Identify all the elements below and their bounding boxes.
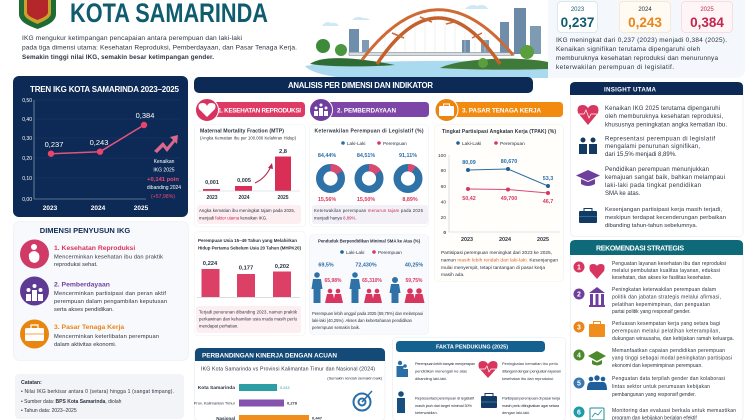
panel: benchmark comparison: (Semakin rendah semakin baik) bbox=[327, 376, 383, 380]
insight: health: Kenaikan IKG 2025 terutama dipengaruhi bbox=[605, 106, 720, 112]
stat card: 2025 bbox=[682, 2, 732, 32]
panel: labour force participation: Tingkat Partisipasi Angkatan Kerja (TPAK) (%) bbox=[442, 129, 556, 135]
panel: maternal mortality chart: 0,001 bbox=[205, 180, 219, 186]
line: IKG values: 0,237 bbox=[45, 140, 63, 149]
heading: analysis by dimension: ANALISIS PER DIMENSI DAN INDIKATOR bbox=[288, 81, 433, 90]
legend bbox=[340, 250, 402, 255]
panel: education attainment: 69,5% bbox=[318, 262, 334, 268]
panel: key insights: INSIGHT UTAMA bbox=[604, 86, 657, 94]
dimension: labour market: Mencerminkan keterlibatan perempuan bbox=[54, 334, 159, 340]
dimension: empowerment: perempuan dalam pengambilan keputusan bbox=[54, 299, 167, 305]
dimension: empowerment: 2. Pemberdayaan bbox=[54, 282, 110, 288]
panel: education attainment bbox=[310, 234, 428, 334]
recommendation 2: Peningkatan keterwakilan perempuan dalam bbox=[612, 287, 716, 293]
stat card: 2025: 2025 bbox=[700, 7, 714, 13]
panel: labour force participation: 40 bbox=[441, 200, 446, 206]
dimension: reproductive health: 1. Kesehatan Reproduksi bbox=[54, 245, 135, 252]
dimension: empowerment: Mencerminkan partisipasi dan peran aktif bbox=[54, 291, 166, 297]
fact: education: dibanding laki-laki. bbox=[415, 376, 447, 381]
insight: legislature bbox=[579, 136, 715, 158]
recommendation 1 bbox=[574, 261, 726, 281]
panel: IKG trend chart: 2024 bbox=[91, 205, 106, 212]
recommendation 5: lintas sektor untuk perumusan kebijakan bbox=[612, 384, 710, 390]
panel: maternal mortality chart: 2025 bbox=[277, 195, 289, 201]
line: IKG values bbox=[45, 111, 154, 157]
dimension: empowerment bbox=[20, 276, 167, 313]
section header: empowerment: 2. PEMBERDAYAAN bbox=[337, 108, 396, 114]
panel: strategic recommendations bbox=[570, 240, 743, 420]
insight: labour bbox=[579, 207, 726, 229]
insight: labour: Kesenjangan partisipasi kerja masih terjadi, bbox=[605, 207, 722, 213]
panel: early marriage and pregnancy chart bbox=[194, 232, 306, 336]
panel: IKG trend chart: 0,40 bbox=[22, 117, 32, 123]
panel: labour force participation: 0 bbox=[443, 230, 446, 236]
line: female: 46,7 bbox=[543, 199, 553, 205]
panel: notes: Catatan: bbox=[21, 380, 42, 386]
fact: education: Perempuan lebih banyak menyerapan bbox=[415, 361, 475, 366]
donut: 2024 bbox=[357, 153, 380, 203]
panel: early marriage and pregnancy chart: Perempuan Usia 15–49 Tahun yang Melahirkan bbox=[198, 238, 297, 243]
recommendation 5: pembangunan yang responsif gender. bbox=[612, 392, 696, 398]
donut: 2023: 84,44% bbox=[318, 153, 336, 159]
heading: analysis by dimension bbox=[194, 77, 533, 93]
panel: notes bbox=[15, 374, 184, 419]
panel: labour force participation: 20 bbox=[441, 215, 446, 221]
note bbox=[312, 311, 423, 330]
insight: education: Pendidikan perempuan menunjukkan bbox=[605, 167, 709, 173]
callout: 2025 increase: (+57,98%) bbox=[151, 194, 175, 200]
section header: labour market: 3. PASAR TENAGA KERJA bbox=[462, 108, 541, 114]
legend: Laki-Laki bbox=[346, 250, 364, 255]
note: namun masih lebih rendah dari laki-laki. Kesenjangan bbox=[441, 258, 558, 264]
bar: Kota Samarinda: Kota Samarinda bbox=[198, 385, 235, 391]
recommendation 1: Penguatan layanan kesehatan ibu dan reproduksi bbox=[612, 261, 726, 267]
dimension: reproductive health: reproduksi sehat. bbox=[54, 262, 98, 268]
intro text bbox=[22, 35, 297, 61]
line: female bbox=[462, 187, 553, 205]
dimension: labour market bbox=[20, 320, 159, 348]
recommendation 1: melalui pembulatan kualitas layanan, edukasi bbox=[612, 268, 720, 274]
donut: 2024: 84,51% bbox=[357, 153, 375, 159]
bar: Nasional bbox=[216, 415, 323, 420]
insight: health bbox=[578, 105, 727, 128]
legend: Laki-Laki bbox=[347, 141, 365, 146]
insight: legislature: mengalami penurunan signifikan, bbox=[605, 144, 700, 150]
panel: early marriage and pregnancy chart: 0,177 bbox=[239, 266, 253, 272]
panel: maternal mortality chart: 2,8 bbox=[279, 149, 288, 155]
line: IKG values: 0,384 bbox=[136, 111, 154, 120]
bar: Prov. Kalimantan Timur: 0,278 bbox=[287, 400, 298, 406]
summary text: keterwakilan perempuan di legislatif. bbox=[556, 64, 674, 71]
insight: education: kemajuan sangat baik, bahkan melampaui bbox=[605, 175, 725, 181]
dimension: labour market: 3. Pasar Tenaga Kerja bbox=[54, 324, 124, 331]
icon: target bbox=[354, 391, 372, 410]
line: male: 80,670 bbox=[501, 159, 517, 165]
panel: notes: • Tahun data: 2023–2025 bbox=[21, 408, 77, 414]
dimension: empowerment: serta akses pendidikan. bbox=[54, 307, 114, 313]
note: Angka kematian ibu meningkat tajam pada 2025, bbox=[199, 208, 295, 213]
legend: Laki-Laki bbox=[462, 141, 481, 147]
note bbox=[312, 205, 428, 224]
panel: IKG trend chart: 0,20 bbox=[22, 156, 32, 162]
legend: Perempuan bbox=[378, 250, 402, 255]
legend: Perempuan bbox=[500, 141, 525, 147]
panel: labour force participation: 2024 bbox=[499, 237, 511, 243]
panel: notes: • Nilai IKG berkisar antara 0 (setara) hingga 1 (sangat timpang). bbox=[21, 389, 174, 395]
line: male bbox=[462, 159, 553, 188]
fact: education bbox=[396, 361, 475, 381]
bar: Kota Samarinda: 0,243 bbox=[280, 386, 290, 390]
stat card: 2023: 2023 bbox=[571, 7, 585, 13]
recommendation 2: pelatihan kepemimpinan, dan penguatan bbox=[612, 302, 710, 308]
panel: IKG dimensions bbox=[14, 222, 188, 360]
recommendation 4 bbox=[574, 348, 732, 369]
section header: reproductive health bbox=[196, 98, 305, 122]
fact: labour: masih perlu ditingkatkan agar setara bbox=[502, 403, 560, 408]
fact: legislature: masih jauh dari target minimal 30% bbox=[415, 403, 473, 408]
intro text: pada tiga dimensi utama: Kesehatan Reproduksi, Pemberdayaan, dan Pasar Tenaga Kerja. bbox=[22, 44, 297, 52]
stat card: 2024: 2024 bbox=[638, 7, 652, 13]
dimension: labour market: dalam aktivitas ekonomi. bbox=[54, 342, 117, 348]
panel: IKG trend chart: 0,50 bbox=[22, 98, 32, 104]
recommendation 5 bbox=[574, 375, 725, 398]
intro text: Semakin tinggi nilai IKG, semakin besar ketimpangan gender. bbox=[22, 54, 214, 61]
panel: benchmark comparison bbox=[194, 348, 385, 420]
panel: maternal mortality chart: 0,005 bbox=[237, 178, 251, 184]
panel: benchmark comparison: PERBANDINGAN KINERJA DENGAN ACUAN bbox=[202, 352, 337, 360]
recommendation 3 bbox=[574, 321, 734, 342]
recommendation 6 bbox=[574, 406, 736, 420]
panel: IKG trend chart: 0,00 bbox=[22, 197, 32, 203]
insight: legislature: dari 15,5% menjadi 8,89%. bbox=[605, 152, 677, 158]
fact: labour: dengan laki-laki. bbox=[502, 410, 530, 415]
bar: Prov. Kalimantan Timur bbox=[194, 400, 298, 406]
panel: labour force participation: 80 bbox=[441, 168, 446, 174]
note: menjadi hanya 8,89%. bbox=[314, 216, 357, 220]
bar: Kota Samarinda bbox=[198, 384, 290, 391]
pictogram: female figures bbox=[325, 288, 424, 303]
insight: education: SMA ke atas. bbox=[605, 191, 641, 197]
callout: 2025 increase: IKG 2025 bbox=[153, 168, 175, 174]
panel: IKG dimensions: DIMENSI PENYUSUN IKG bbox=[40, 226, 130, 235]
donut: 2025: 91,11% bbox=[399, 153, 417, 159]
note: perkawinan dan kehamilan usia muda masih perlu bbox=[199, 316, 298, 322]
fact: education: pendidikan menengah ke atas bbox=[415, 368, 467, 374]
recommendation 3: perempuan melalui pelatihan keterampilan, bbox=[612, 328, 720, 334]
panel: maternal mortality chart: (Angka Kematian Ibu per 100.000 Kelahiran Hidup) bbox=[200, 136, 297, 140]
recommendation 5: Penguatan data terpilah gender dan kolaborasi bbox=[612, 376, 725, 382]
section header: empowerment bbox=[310, 98, 429, 122]
panel: labour force participation: 2023 bbox=[461, 237, 473, 243]
note bbox=[197, 205, 301, 224]
fact: maternal mortality: ditangani dengan penguatan layanan bbox=[502, 368, 561, 374]
panel: strategic recommendations: REKOMENDASI STRATEGIS bbox=[596, 246, 684, 252]
callout: 2025 increase: dibanding 2024 bbox=[147, 185, 181, 191]
fact: legislature: Representasi perempuan di legislatif bbox=[415, 396, 475, 400]
section header: reproductive health: 1. KESEHATAN REPRODUKSI bbox=[218, 108, 301, 114]
stat card: 2024 bbox=[620, 2, 670, 32]
insight: legislature: Representasi perempuan di legislatif bbox=[605, 136, 715, 142]
line: female: 50,42 bbox=[462, 196, 476, 202]
callout: 2025 increase: +0,141 poin bbox=[147, 177, 179, 183]
line: male: 80,09 bbox=[462, 160, 476, 166]
panel: IKG trend chart bbox=[13, 76, 188, 217]
panel: education attainment: 65,98% bbox=[325, 278, 342, 284]
donut: 2025: 8,89% bbox=[402, 197, 418, 203]
panel: education attainment: 72,430% bbox=[355, 262, 377, 268]
fact: labour bbox=[481, 394, 561, 415]
dimension: reproductive health bbox=[20, 240, 163, 268]
panel: IKG summary bbox=[548, 0, 745, 78]
panel: notes: • Sumber data: BPS Kota Samarinda, diolah bbox=[21, 399, 122, 405]
recommendation 2 bbox=[574, 287, 721, 315]
panel: education attainment: 65,310% bbox=[362, 278, 382, 284]
panel: legislative representation bbox=[310, 124, 428, 226]
donut: 2023: 15,56% bbox=[318, 197, 336, 203]
recommendation 6: 6 bbox=[577, 410, 581, 416]
panel: maternal mortality chart: 2024 bbox=[238, 195, 250, 201]
recommendation 6: Monitoring dan evaluasi berkala untuk memastikan bbox=[612, 408, 736, 414]
logo: city shield bbox=[19, 0, 56, 29]
panel: early marriage and pregnancy chart: Hidup Pertama Sebelum Usia 20 Tahun (MHPK20) bbox=[198, 246, 302, 250]
note: mendapat perhatian. bbox=[199, 324, 238, 328]
section header: labour market bbox=[435, 98, 563, 122]
panel: maternal mortality chart bbox=[194, 124, 306, 226]
panel: maternal mortality chart: 2023 bbox=[206, 195, 218, 201]
insight: education bbox=[576, 167, 725, 197]
note: mulai menyempit, tetapi tantangan di pasar kerja bbox=[441, 265, 545, 271]
legend bbox=[341, 141, 407, 146]
note bbox=[196, 306, 301, 333]
fact: legislature: keterwakilan. bbox=[415, 410, 438, 415]
panel: IKG trend chart: 2025 bbox=[134, 205, 149, 212]
recommendation 4: 4 bbox=[577, 352, 581, 360]
summary text: memburuknya kesehatan reproduksi dan menurunnya bbox=[556, 55, 718, 62]
fact: labour: Partisipasi perempuan di pasar kerja bbox=[502, 396, 561, 400]
note: menjadi faktor utama kenaikan IKG. bbox=[199, 216, 267, 220]
recommendation 3: 3 bbox=[577, 324, 581, 332]
note: Perempuan lebih unggul pada 2025 (59,75%) dan melampaui bbox=[312, 311, 423, 316]
panel: IKG trend chart: 0,30 bbox=[22, 136, 32, 142]
note: Keterwakilan perempuan menurun tajam pada 2025 bbox=[314, 208, 424, 213]
panel: early marriage and pregnancy chart: 0,202 bbox=[275, 264, 289, 270]
recommendation 1: 1 bbox=[577, 264, 581, 272]
recommendation 4: yang tinggi sebagai modal peningkatan partisipasi bbox=[612, 356, 732, 362]
panel: education attainment: 40,25% bbox=[405, 262, 423, 268]
donut: 2025 bbox=[397, 153, 419, 203]
insight: health: oleh memburuknya kesehatan reproduksi, bbox=[605, 114, 723, 120]
legend bbox=[456, 141, 525, 147]
note: Terjadi penurunan dibanding 2023, namun praktik bbox=[199, 310, 298, 314]
panel: IKG trend chart: 0,10 bbox=[22, 176, 32, 182]
fact: maternal mortality: kesehatan ibu dan reproduksi. bbox=[502, 376, 554, 381]
dimension: reproductive health: Mencerminkan kesehatan ibu dan praktik bbox=[54, 254, 163, 260]
illustration: Mahakam bridge and skyline bbox=[305, 5, 550, 78]
panel: benchmark comparison: IKG Kota Samarinda vs Provinsi Kalimantan Timur dan Nasional (2024) bbox=[201, 366, 375, 372]
note bbox=[441, 250, 558, 278]
insight: labour: meskipun terdapat kecenderungan perbaikan bbox=[605, 215, 726, 221]
donut: 2023 bbox=[318, 153, 341, 203]
panel: IKG trend chart: TREN IKG KOTA SAMARINDA 2023–2025 bbox=[30, 85, 180, 94]
panel: education attainment: Penduduk Berpendidikan Minimal SMA ke Atas (%) bbox=[318, 238, 421, 244]
legend: Perempuan bbox=[383, 141, 407, 146]
line: male: 53,3 bbox=[543, 176, 553, 182]
note: masih ada. bbox=[441, 272, 464, 278]
recommendation 4: Memanfaatkan capaian pendidikan perempuan bbox=[612, 348, 725, 354]
insight: education: laki-laki pada tingkat pendidikan bbox=[605, 183, 701, 189]
note: perempuan semakin baik. bbox=[312, 325, 360, 330]
fact: legislature bbox=[397, 391, 475, 415]
recommendation 3: Perluasan kesempatan kerja yang setara bagi bbox=[612, 321, 720, 327]
panel: key insights bbox=[570, 82, 743, 236]
insight: labour: dibanding tahun-tahun sebelumnya. bbox=[605, 223, 698, 229]
recommendation 2: partai politik yang responsif gender. bbox=[612, 309, 691, 315]
bar: Prov. Kalimantan Timur: Prov. Kalimantan Timur bbox=[194, 400, 236, 406]
recommendation 2: 2 bbox=[577, 292, 581, 298]
panel: supporting facts bbox=[392, 338, 566, 420]
stat card: 2023: 0,237 bbox=[561, 15, 594, 30]
panel: early marriage and pregnancy chart: 0,224 bbox=[203, 261, 218, 267]
panel: labour force participation bbox=[434, 124, 564, 282]
recommendation 2: politik dan jabatan strategis melalui afirmasi, bbox=[612, 294, 721, 300]
panel: labour force participation: 60 bbox=[441, 184, 446, 190]
pictogram: male figures bbox=[312, 272, 400, 303]
panel: maternal mortality chart: Maternal Mortality Fraction (MTP) bbox=[200, 128, 284, 134]
panel: IKG trend chart: 2023 bbox=[43, 205, 58, 212]
icon: rising arrow bbox=[154, 135, 178, 153]
stat card: 2023 bbox=[558, 2, 598, 32]
summary text bbox=[556, 37, 727, 71]
recommendation 3: dukungan wirausaha, dan kebijakan ramah keluarga. bbox=[612, 336, 734, 342]
line: IKG values: 0,243 bbox=[90, 138, 108, 147]
summary text: Kenaikan signifikan terutama dipengaruhi oleh bbox=[556, 46, 700, 53]
intro text: IKG mengukur ketimpangan pencapaian antara perempuan dan laki-laki bbox=[22, 35, 243, 42]
recommendation 5: 5 bbox=[577, 380, 581, 388]
insight: health: khususnya peningkatan angka kematian ibu. bbox=[605, 122, 727, 128]
panel: labour force participation: 2025 bbox=[537, 237, 549, 243]
panel: labour force participation: 100 bbox=[438, 153, 446, 159]
callout: 2025 increase bbox=[147, 159, 181, 200]
line: female: 49,700 bbox=[501, 196, 517, 202]
panel: education attainment: 59,75% bbox=[406, 278, 423, 284]
callout: 2025 increase: Kenaikan bbox=[154, 159, 175, 165]
stat card: 2024: 0,243 bbox=[628, 15, 662, 30]
fact: maternal mortality bbox=[478, 361, 561, 381]
stat card: 2025: 0,384 bbox=[690, 15, 724, 30]
recommendation 4: ekonomi dan kepemimpinan perempuan. bbox=[612, 363, 703, 369]
donut: 2024: 15,50% bbox=[357, 197, 375, 203]
fact: maternal mortality: Peningkatan kematian ibu perlu bbox=[502, 361, 558, 366]
summary text: IKG meningkat dari 0,237 (2023) menjadi 0,384 (2025). bbox=[556, 37, 727, 44]
note: Partisipasi perempuan meningkat dari 2023 ke 2025, bbox=[441, 250, 552, 256]
recommendation 1: kesehatan, dan akses ke fasilitas kesehatan. bbox=[612, 275, 712, 281]
panel: supporting facts: FAKTA PENDUKUNG (2025) bbox=[436, 344, 508, 350]
panel: legislative representation: Keterwakilan Perempuan di Legislatif (%) bbox=[314, 128, 424, 134]
note: laki-laki (40,25%). Akses dan kebertahanan pendidikan bbox=[312, 318, 413, 323]
